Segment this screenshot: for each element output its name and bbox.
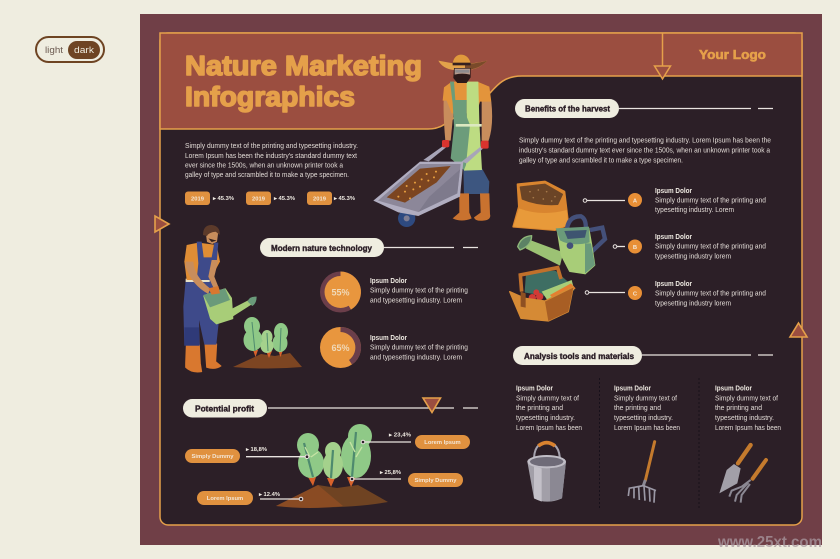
label: Lorem Ipsum bottom: Lorem Ipsum: [207, 496, 243, 502]
icon: trowel and hand fork: [719, 445, 766, 503]
benefits paragraph: galley of type and scrambled it to make a type specimen.: [519, 158, 683, 164]
benefits paragraph: Simply dummy text of the printing and typesetting industry. Lorem Ipsum has been the: [519, 138, 771, 144]
toggle: light / dark: dark: [74, 45, 95, 55]
column 1 text: the printing and: [516, 405, 563, 412]
item: 55% description: Simply dummy text of the printing: [370, 288, 468, 294]
item: 65% description: Simply dummy text of the printing: [370, 344, 468, 352]
stat badges: [185, 192, 355, 205]
heading pill: potential: [183, 399, 267, 418]
arrow: right marker: [790, 323, 807, 337]
stat badges: 2019: [191, 196, 205, 202]
benefit C: [585, 281, 766, 308]
label: Lorem Ipsum bottom: ▸ 12.4%: [258, 492, 280, 498]
section: benefits of the harvest: [510, 99, 773, 321]
benefit C: Simply dummy text of the printing and: [655, 290, 766, 298]
column 2 text: [614, 386, 680, 432]
benefit C: typesetting industry lorem: [655, 300, 731, 308]
section: modern nature technology: [183, 225, 478, 372]
column 1 text: Simply dummy text of: [516, 396, 579, 402]
item: 55% description: and typesetting industry. Lorem: [370, 298, 462, 304]
item: 65% description: [370, 335, 468, 362]
benefits paragraph: [519, 138, 771, 164]
title: Nature Marketing: [185, 50, 422, 81]
heading pill: analysis: [513, 346, 642, 365]
section: potential profit: [183, 398, 478, 508]
item: 65% description: Ipsum Dolor: [370, 335, 407, 342]
donut chart: 55%: 55%: [331, 288, 350, 298]
heading pill: benefits: [515, 99, 619, 118]
intro text block: ever since the 1500s, when an unknown printer took a: [185, 162, 343, 170]
benefit A: typesetting industry. Lorem: [655, 207, 734, 214]
stat badges: 2019: [313, 196, 327, 202]
stat badges: ▸ 45.3%: [212, 196, 234, 202]
column 3 text: Lorem Ipsum has been: [715, 425, 781, 432]
column 1 text: typesetting industry.: [516, 415, 575, 422]
item: 55% description: Ipsum Dolor: [370, 278, 407, 285]
illustration: small carrots and soil: [233, 317, 302, 368]
stat badges: ▸ 45.3%: [333, 196, 355, 202]
intro text block: [185, 143, 358, 179]
intro text block: galley of type and scrambled it to make a type specimen.: [185, 172, 349, 179]
benefits paragraph: industry's standard dummy text ever since the 1500s, when an unknown printer took a: [519, 148, 770, 154]
benefit C: C: [633, 292, 638, 298]
benefit B: typesetting industry lorem: [655, 254, 731, 260]
benefit B: [613, 234, 766, 260]
illustration: farmer with wheelbarrow: [373, 55, 492, 227]
illustration: watering can: [518, 216, 605, 273]
heading pill: benefits: Benefits of the harvest: [525, 104, 610, 114]
label: Simply Dummy left: ▸ 18,8%: [245, 447, 267, 453]
logo text: Your Logo: [699, 47, 766, 62]
arrow: header pointer: [654, 33, 670, 79]
icon: rake: [628, 442, 656, 503]
illustration: sack of soil: [513, 182, 568, 230]
benefit A: Simply dummy text of the printing and: [655, 198, 766, 204]
column 1 text: Lorem Ipsum has been: [516, 425, 582, 432]
donut chart: 65%: 65%: [331, 343, 350, 353]
label: Simply Dummy left: [185, 447, 309, 463]
label: Lorem Ipsum top right: Lorem Ipsum: [424, 440, 461, 446]
panel: outer background: [140, 14, 822, 545]
column 3 text: the printing and: [715, 405, 762, 412]
heading pill: potential: Potential profit: [195, 404, 254, 414]
label: Simply Dummy left: Simply Dummy: [192, 454, 234, 460]
benefit C: Ipsum Dolor: [655, 281, 692, 288]
column 2 text: Lorem Ipsum has been: [614, 425, 680, 432]
illustration: large carrots and soil: [276, 424, 388, 508]
donut chart: 55%: [320, 272, 361, 312]
item: 65% description: and typesetting industry. Lorem: [370, 354, 462, 362]
arrow: profit marker: [423, 398, 440, 412]
benefit B: Simply dummy text of the printing and: [655, 244, 766, 250]
title: Infographics: [185, 81, 355, 112]
heading pill: modern: Modern nature technology: [271, 243, 372, 253]
heading pill: analysis: Analysis tools and materials: [524, 351, 634, 361]
column 2 text: typesetting industry.: [614, 415, 673, 422]
stat badges: 2019: [252, 196, 266, 202]
benefit A: A: [633, 198, 638, 204]
panel: dark content frame: [160, 33, 802, 525]
label: Lorem Ipsum top right: ▸ 23,4%: [388, 432, 411, 438]
arrow: left marker: [155, 216, 169, 232]
illustration: harvest basket: [510, 268, 576, 321]
donut chart: 65%: [320, 327, 361, 368]
benefit B: B: [633, 245, 637, 251]
benefit B: Ipsum Dolor: [655, 234, 692, 241]
column 1 text: [516, 386, 582, 432]
label: Lorem Ipsum bottom: [197, 491, 303, 505]
watermark: www.25xt.com: [717, 534, 822, 551]
label: Simply Dummy right: ▸ 25,8%: [379, 470, 401, 476]
column 2 text: the printing and: [614, 405, 661, 412]
column 1 text: Ipsum Dolor: [516, 386, 553, 392]
column 2 text: Ipsum Dolor: [614, 386, 651, 392]
column 2 text: Simply dummy text of: [614, 396, 677, 402]
label: Simply Dummy right: [350, 470, 463, 487]
column 3 text: typesetting industry.: [715, 415, 774, 422]
label: Simply Dummy right: Simply Dummy: [415, 478, 457, 484]
section: analysis tools and materials: [513, 346, 781, 510]
intro text block: Simply dummy text of the printing and typesetting industry.: [185, 143, 358, 150]
column 3 text: Simply dummy text of: [715, 396, 778, 402]
intro text block: Lorem Ipsum has been the industry's standard dummy text: [185, 153, 357, 160]
benefit A: [583, 188, 766, 214]
benefit A: Ipsum Dolor: [655, 188, 692, 195]
title: [185, 50, 422, 112]
column 3 text: Ipsum Dolor: [715, 386, 752, 392]
label: Lorem Ipsum top right: [361, 432, 470, 449]
icon: bucket: [527, 443, 566, 502]
heading pill: modern: [260, 238, 384, 257]
item: 55% description: [370, 278, 468, 304]
panel: header band: [160, 33, 802, 129]
illustration: gardener: [183, 225, 257, 372]
toggle: light / dark: light: [45, 45, 64, 55]
column 3 text: [715, 386, 781, 432]
toggle: light / dark: [36, 37, 104, 62]
stat badges: ▸ 45.3%: [273, 196, 295, 202]
